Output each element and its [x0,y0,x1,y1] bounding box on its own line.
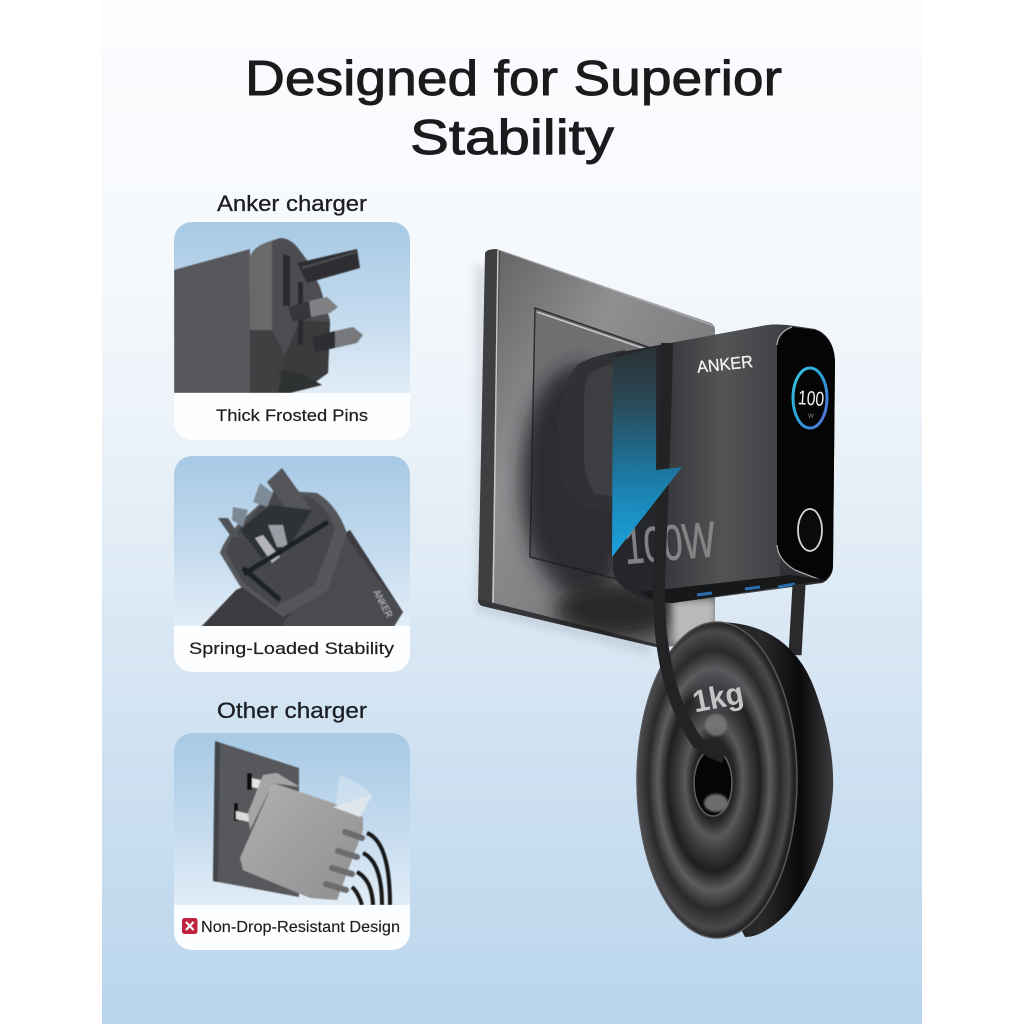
power ring gauge [793,368,827,428]
lightning bolt [612,347,682,557]
heading: Other charger: Other charger [217,698,367,723]
illustration: plug with folding pins [174,456,410,628]
title: Designed for Superior [245,52,782,106]
panel: non-drop-resistant design [174,733,410,950]
front strap [659,343,724,757]
illustration: plug with thick pins [174,222,410,393]
illustration: plug with folding pins: ANKER [370,588,394,620]
right strap [795,585,799,655]
power button [798,509,822,551]
printed 100W: 100W [622,511,718,575]
power ring gauge: W [808,414,814,420]
panel: spring-loaded stability [174,456,410,672]
heading: Anker charger: Anker charger [217,191,367,216]
caption: Thick Frosted Pins [216,406,368,425]
charger body [613,320,836,605]
display panel [777,327,836,583]
caption: Spring-Loaded Stability [189,639,395,658]
illustration: wall socket, charger and 1kg weight [474,249,836,938]
logo: ANKER [696,352,754,377]
icon: red cross [182,918,198,934]
panel: thick frosted pins [174,222,410,440]
power ring gauge: 100 [797,387,825,411]
wall socket plate [478,249,716,648]
caption: Non-Drop-Resistant Design [201,919,400,936]
1kg weight [637,622,833,938]
wall plate shadow [474,260,650,655]
illustration: sagging competitor charger [174,733,410,905]
title [245,52,782,165]
charging ports [640,575,828,603]
title: Stability [410,111,615,165]
adapter plug base [558,350,625,515]
1kg weight: 1kg [690,675,746,719]
